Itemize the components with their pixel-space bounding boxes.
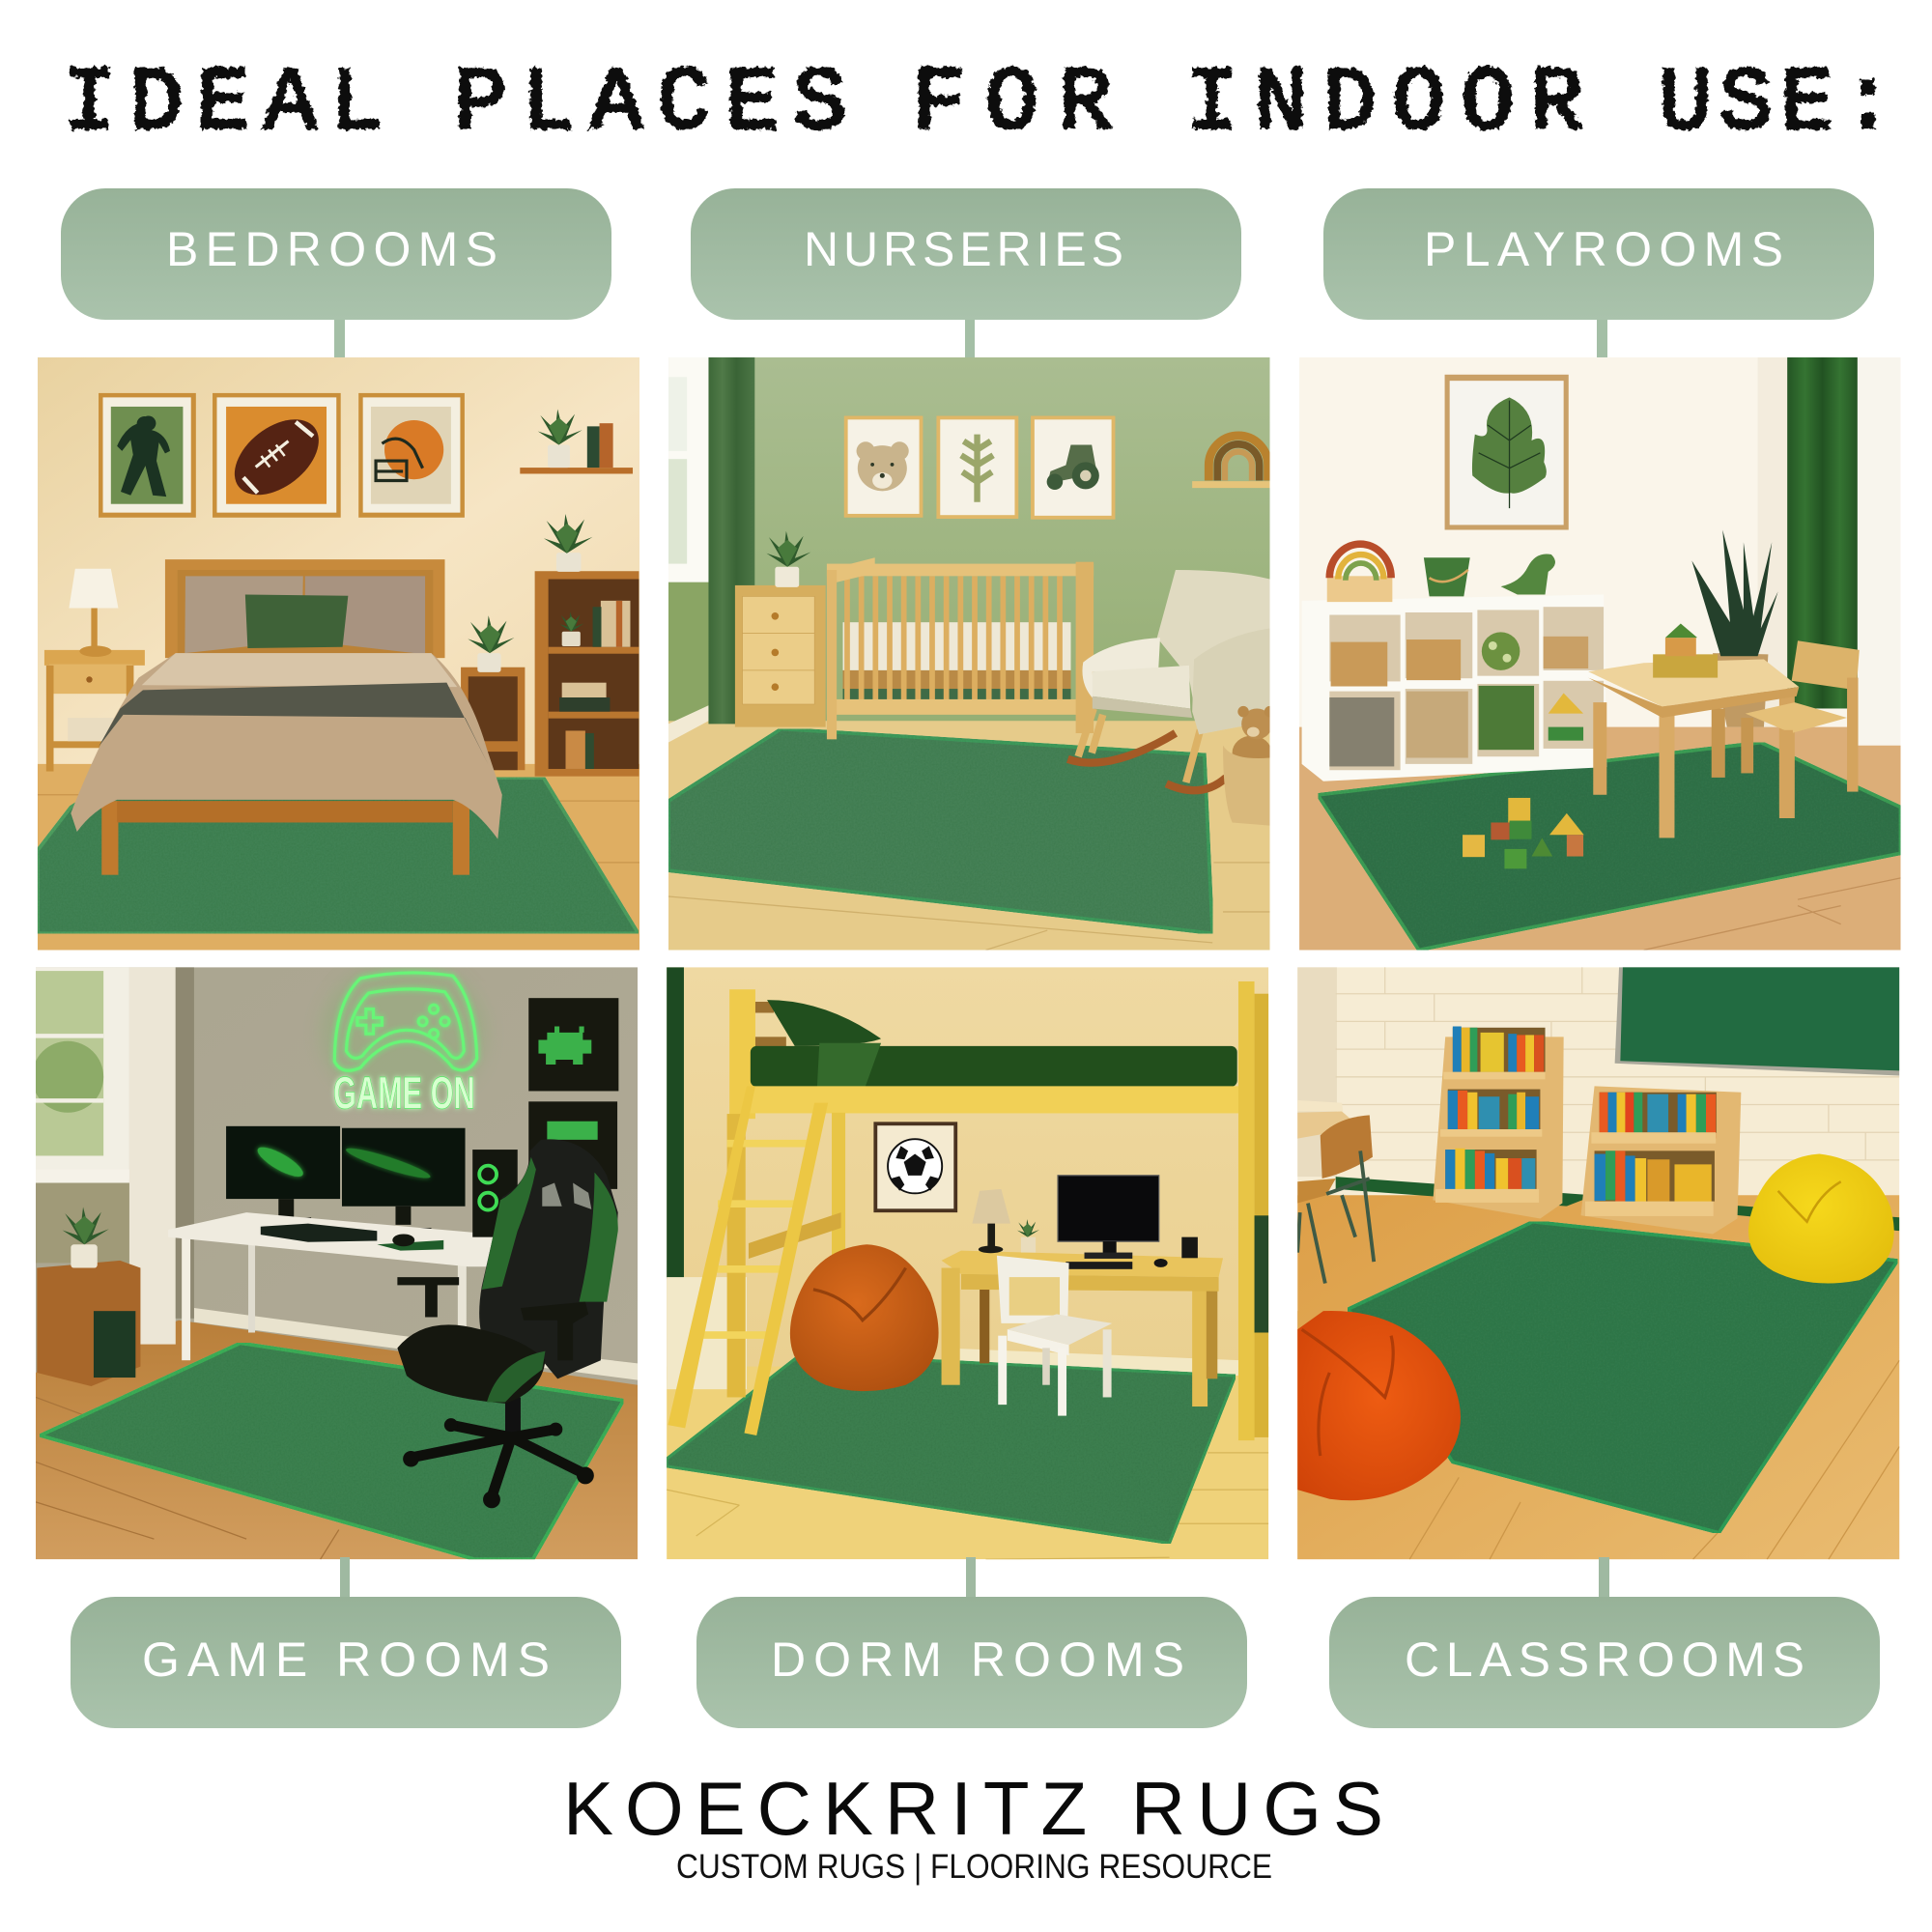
monitor and desk items <box>972 1176 1198 1269</box>
neon controller sign <box>321 960 487 1119</box>
side table with plant <box>37 1207 140 1386</box>
framed soccer ball <box>873 1122 957 1212</box>
label: playrooms: PLAYROOMS <box>1424 222 1783 276</box>
label: classrooms <box>1329 1557 1880 1728</box>
rug: dorm <box>667 1354 1236 1544</box>
pc tower <box>472 1150 518 1237</box>
loft bed <box>729 981 1268 1440</box>
dresser <box>735 531 826 727</box>
label: classrooms: CLASSROOMS <box>1405 1633 1804 1687</box>
rug: game room <box>40 1343 623 1559</box>
desk <box>942 1251 1223 1406</box>
curtain <box>667 967 684 1278</box>
curtain <box>708 357 754 724</box>
brand name: KOECKRITZ RUGS <box>563 1766 1383 1851</box>
crib <box>827 557 1094 739</box>
title: INDOOR <box>1185 53 1583 155</box>
label: nurseries <box>691 188 1241 359</box>
label: bedrooms: BEDROOMS <box>166 222 497 276</box>
basket with teddy <box>1223 705 1269 825</box>
panel: classroom scene <box>1297 967 1899 1559</box>
cube shelf <box>1302 594 1606 781</box>
label: dorm rooms <box>696 1557 1247 1728</box>
bookshelf right <box>1581 1086 1741 1234</box>
window <box>32 967 129 1263</box>
plant <box>1691 530 1778 727</box>
shelf with plant and books <box>520 409 633 473</box>
desk <box>168 1212 511 1360</box>
rainbow on shelf <box>1192 436 1270 488</box>
panel: game room scene <box>32 960 638 1559</box>
panel: dorm room scene <box>667 967 1268 1559</box>
white chair <box>997 1256 1112 1416</box>
framed leaf print <box>1445 375 1569 530</box>
bed <box>71 559 502 875</box>
label: bedrooms <box>61 188 611 359</box>
panel: bedroom scene <box>38 357 639 950</box>
rug: playroom <box>1319 743 1901 950</box>
bookcase <box>535 514 639 777</box>
tagline: CUSTOM RUGS | FLOORING RESOURCE <box>676 1848 1272 1886</box>
beanbag orange <box>790 1244 939 1391</box>
gaming chair <box>397 1139 618 1508</box>
sheer curtain <box>1858 357 1901 746</box>
chalkboard <box>1615 967 1899 1076</box>
pixel art frames <box>528 998 618 1189</box>
rug: nursery <box>668 729 1212 933</box>
label: game rooms <box>71 1557 621 1728</box>
title: FOR <box>912 53 1112 155</box>
side table with plant <box>461 615 525 770</box>
label: nurseries: NURSERIES <box>804 222 1123 276</box>
blocks on rug <box>1463 798 1584 868</box>
window <box>668 357 713 743</box>
panel: playroom scene <box>1299 357 1901 950</box>
title: IDEAL <box>63 53 384 155</box>
title <box>63 53 1894 155</box>
rug: bedroom <box>38 778 639 933</box>
title: PLACES <box>454 53 846 155</box>
chair <box>1741 640 1860 810</box>
title: USE: <box>1659 53 1894 155</box>
wall art: football prints <box>99 393 465 518</box>
yellow beanbag <box>1748 1154 1894 1283</box>
storage crate <box>667 1277 747 1389</box>
ladder <box>668 1086 841 1435</box>
wall art: animal prints <box>844 416 1115 520</box>
curtain <box>1787 357 1858 708</box>
label: dorm rooms: DORM ROOMS <box>771 1633 1184 1687</box>
panel: nursery scene <box>668 357 1275 950</box>
table and chair <box>1297 1100 1374 1283</box>
rug: classroom <box>1348 1222 1897 1533</box>
label: game rooms: GAME ROOMS <box>142 1633 550 1687</box>
toys on shelf <box>1327 544 1555 602</box>
monitors <box>226 1126 466 1233</box>
table with blocks <box>1588 623 1799 838</box>
neon controller sign: GAME ON <box>333 1067 475 1119</box>
bookshelf left <box>1433 1027 1564 1218</box>
orange beanbag <box>1297 1311 1461 1500</box>
nightstand and lamp <box>44 569 145 772</box>
label: playrooms <box>1323 188 1874 359</box>
rocking chair <box>1067 570 1270 790</box>
curtain <box>129 967 176 1345</box>
